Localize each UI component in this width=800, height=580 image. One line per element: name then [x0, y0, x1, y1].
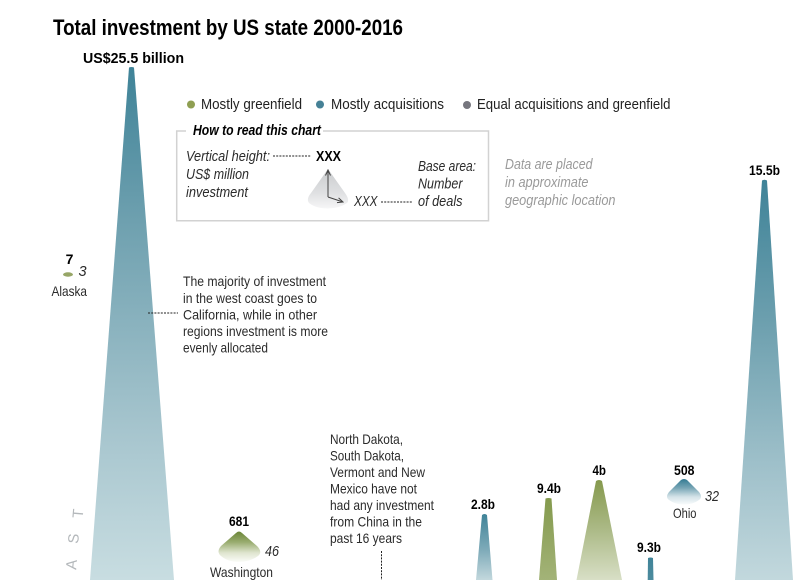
panel: how to read this chart: US$ million — [186, 167, 249, 183]
spire: California US$25.5 billion: US$25.5 billion — [83, 51, 184, 67]
legend — [187, 97, 670, 113]
region label: East — [63, 508, 87, 570]
state: Alaska — [52, 251, 87, 299]
spire: 9.4b: 9.4b — [537, 480, 561, 496]
state: Ohio — [667, 462, 719, 521]
state: Alaska: 7 — [66, 251, 74, 267]
annotation: states with no investment: past 16 years — [330, 530, 402, 546]
panel: how to read this chart: Number — [418, 176, 464, 192]
spire: 9.3b: 9.3b — [637, 539, 661, 555]
spire: 9.4b — [537, 480, 561, 580]
annotation: states with no investment — [330, 431, 434, 580]
panel: how to read this chart — [177, 123, 488, 221]
panel: how to read this chart: of deals — [418, 194, 462, 210]
state: Washington: Washington — [210, 564, 273, 580]
legend: Mostly greenfield — [201, 97, 302, 113]
state: Ohio: Ohio — [673, 505, 697, 521]
panel: how to read this chart: XXX — [316, 149, 341, 165]
state: Ohio: 32 — [705, 489, 719, 505]
spire: 2.8b: 2.8b — [471, 496, 495, 512]
note: geographic placement: Data are placed — [505, 157, 593, 173]
annotation: states with no investment: had any investment — [330, 497, 434, 513]
state: Alaska: Alaska — [52, 283, 87, 299]
spire: 2.8b — [471, 496, 495, 580]
spire: 15.5b: 15.5b — [749, 162, 780, 178]
panel: how to read this chart: XXX — [353, 194, 379, 210]
annotation: states with no investment: Vermont and New — [330, 464, 426, 480]
state: Washington — [210, 513, 280, 580]
note: geographic placement — [505, 157, 616, 209]
spire: 9.3b — [637, 539, 661, 580]
legend: Mostly acquisitions — [331, 97, 444, 113]
annotation: west coast: in the west coast goes to — [183, 290, 317, 306]
panel: how to read this chart: Base area: — [418, 159, 476, 175]
spire: California US$25.5 billion — [83, 51, 184, 580]
annotation: west coast — [148, 273, 328, 356]
spire: 4b — [576, 462, 622, 580]
legend: Equal acquisitions and greenfield — [477, 97, 670, 113]
region label: East: S — [65, 533, 83, 544]
region label: East: T — [70, 508, 87, 519]
annotation: states with no investment: from China in the — [330, 514, 422, 530]
spire: 4b: 4b — [592, 462, 606, 478]
note: geographic placement: in approximate — [505, 175, 588, 191]
state: Washington: 46 — [265, 544, 280, 560]
state: Ohio: 508 — [674, 462, 695, 478]
region label: East: A — [63, 559, 81, 570]
state: Washington: 681 — [229, 513, 249, 529]
panel: how to read this chart: investment — [186, 185, 249, 201]
annotation: west coast: The majority of investment — [183, 273, 326, 289]
panel: how to read this chart: How to read this chart — [193, 123, 322, 139]
annotation: states with no investment: South Dakota, — [330, 448, 404, 464]
annotation: west coast: regions investment is more — [183, 323, 328, 339]
panel: how to read this chart: Vertical height: — [186, 149, 270, 165]
annotation: west coast: California, while in other — [183, 306, 317, 322]
annotation: west coast: evenly allocated — [183, 340, 268, 356]
spire: 15.5b — [735, 162, 793, 580]
note: geographic placement: geographic location — [505, 193, 616, 209]
annotation: states with no investment: North Dakota, — [330, 431, 403, 447]
title: Total investment by US state 2000-2016 — [53, 15, 403, 40]
state: Alaska: 3 — [78, 264, 87, 280]
annotation: states with no investment: Mexico have not — [330, 480, 417, 496]
